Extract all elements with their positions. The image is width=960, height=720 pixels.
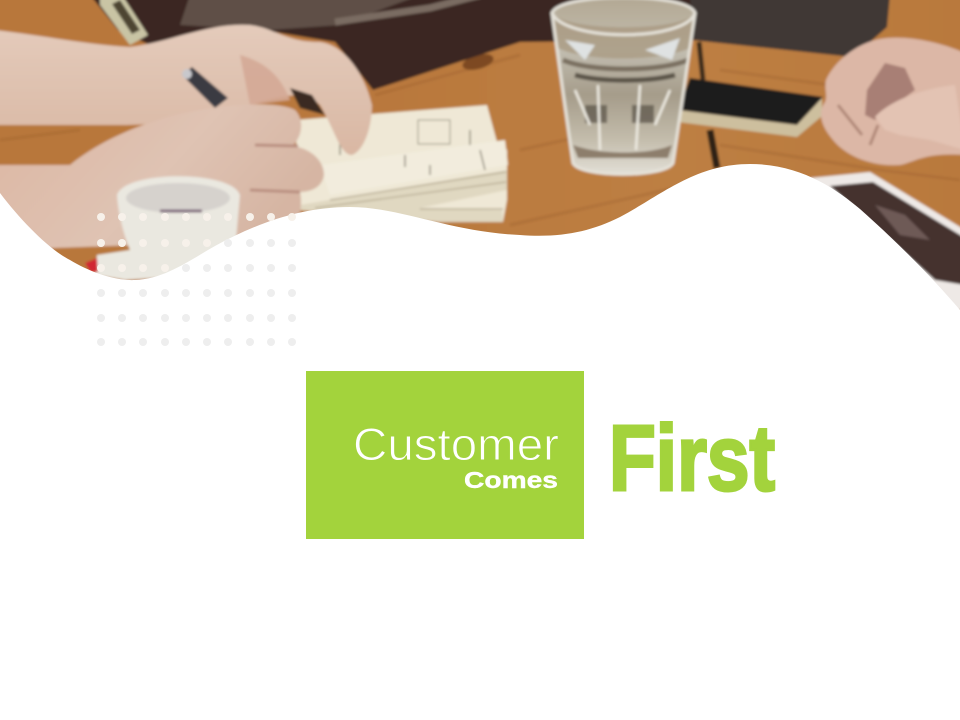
heading: Customer: Customer (353, 419, 559, 470)
white wave shape (0, 164, 960, 720)
wooden table (0, 0, 960, 325)
heading: First: First (609, 406, 775, 510)
right hand (821, 38, 960, 165)
notebook (295, 105, 507, 222)
lower left hand (0, 104, 324, 250)
heading: Comes: Comes (464, 467, 558, 493)
red saucer detail (85, 258, 98, 272)
phone (678, 78, 823, 125)
title panel: green box (306, 371, 584, 539)
water glass (552, 0, 695, 174)
tablet (810, 172, 960, 310)
coffee cup (95, 176, 240, 280)
dot grid pattern (97, 213, 296, 346)
upper left hand and pen (0, 25, 372, 155)
photo: hands, notebook and water glass on a wooden table (0, 0, 960, 325)
bag buckle (100, 0, 148, 45)
dark bag at top (90, 0, 887, 90)
